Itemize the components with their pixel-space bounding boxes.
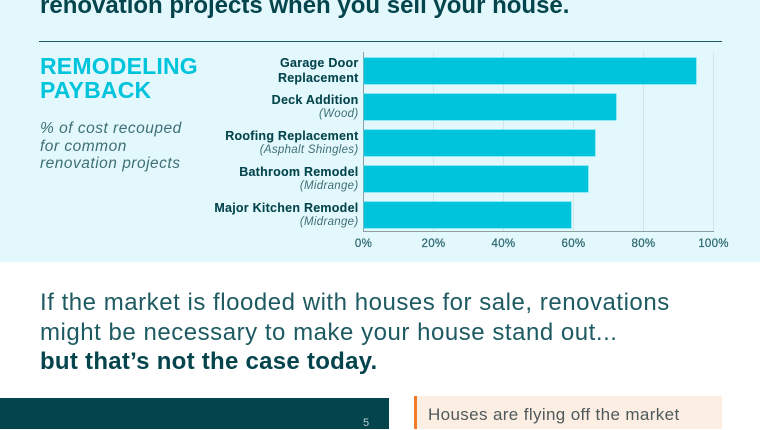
axis tick labels: 100% — [698, 238, 729, 250]
label: major kitchen remodel: Major Kitchen Remodel — [214, 200, 358, 214]
bar: deck addition — [364, 94, 616, 120]
heading: remodeling payback: REMODELING — [40, 53, 198, 79]
bar: garage door replacement — [364, 58, 696, 84]
axis tick labels — [355, 238, 729, 250]
label: roofing replacement: Roofing Replacement — [225, 128, 358, 142]
label: garage door replacement — [278, 56, 358, 85]
label: major kitchen remodel — [214, 200, 358, 228]
label: deck addition: (Wood) — [319, 108, 358, 120]
axis tick labels: 80% — [632, 238, 655, 250]
bar chart: percent of cost recouped — [214, 52, 729, 250]
axis tick labels: 40% — [492, 238, 515, 250]
label: bathroom remodel — [239, 164, 358, 192]
axis tick labels: 20% — [422, 238, 445, 250]
text: market statement: might be necessary to make your house stand out... — [40, 318, 617, 346]
divider rule — [39, 41, 722, 42]
label: deck addition — [272, 92, 358, 120]
text: chart description: for common — [40, 138, 127, 155]
text: chart description: renovation projects — [40, 155, 180, 172]
axis lines — [363, 52, 364, 232]
heading: remodeling payback: PAYBACK — [40, 77, 151, 103]
horizontal axis — [363, 231, 714, 232]
bar: major kitchen remodel — [364, 202, 570, 228]
text: chart description: % of cost recouped — [40, 120, 182, 137]
label: garage door replacement: Replacement — [278, 71, 358, 85]
bar: roofing replacement — [364, 130, 594, 156]
axis tick labels: 0% — [355, 238, 372, 250]
axis number: 5 — [363, 416, 369, 428]
axis tick labels: 60% — [562, 238, 585, 250]
label: bathroom remodel: Bathroom Remodel — [239, 164, 358, 178]
label: deck addition: Deck Addition — [272, 92, 358, 106]
text: market statement: If the market is flooded with houses for sale, renovations — [40, 289, 670, 316]
label: bathroom remodel: (Midrange) — [300, 180, 358, 192]
label: roofing replacement: (Asphalt Shingles) — [260, 144, 358, 156]
text: market statement: but that’s not the case today. — [40, 348, 377, 375]
bar: bathroom remodel — [364, 166, 588, 192]
text: market statement — [40, 289, 670, 375]
panel: dark chart box — [0, 398, 388, 428]
callout: houses flying off the market — [414, 396, 722, 428]
panel: remodeling payback — [0, 0, 760, 262]
callout accent bar — [414, 396, 416, 428]
callout text: Houses are flying off the market — [428, 404, 680, 424]
heading: remodeling payback — [40, 53, 198, 103]
label: garage door replacement: Garage Door — [280, 56, 358, 70]
label: roofing replacement — [225, 128, 358, 156]
text: chart description — [40, 120, 182, 172]
label: major kitchen remodel: (Midrange) — [300, 216, 358, 228]
